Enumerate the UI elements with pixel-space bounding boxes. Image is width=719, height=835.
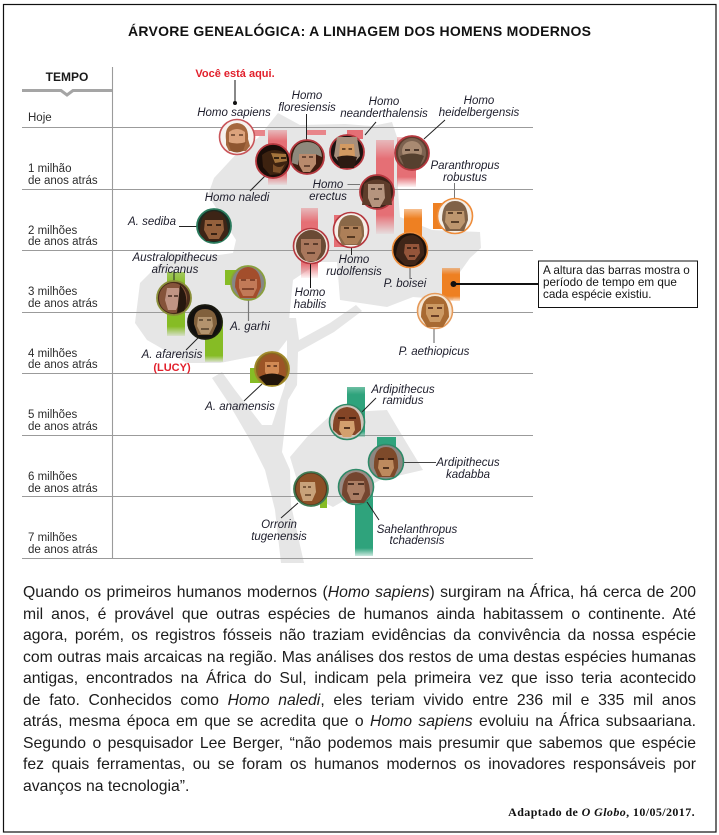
- time axis labels: de anos atrás: [28, 298, 98, 310]
- leader: [310, 264, 312, 288]
- portrait: [294, 472, 328, 506]
- species: Homo sapiens: [195, 68, 275, 154]
- label: P. boisei: [384, 278, 427, 290]
- portrait: [256, 144, 290, 178]
- label: P. aethiopicus: [399, 346, 470, 358]
- leader: [350, 248, 352, 255]
- label: A. anamensis: [204, 401, 275, 413]
- portrait: [231, 266, 265, 300]
- callout box: [538, 261, 698, 308]
- time grid: [22, 67, 533, 558]
- body paragraph: Quando os primeiros humanos modernos (Homo sapiens) surgiram na África, há cerca de 200: [23, 584, 696, 601]
- species duration bars: [167, 130, 460, 556]
- portrait: [330, 135, 364, 169]
- time axis labels: de anos atrás: [28, 236, 98, 248]
- portrait: [188, 305, 222, 339]
- species: Homo habilis: [294, 228, 328, 311]
- pointer dot: [233, 101, 237, 105]
- label: Orrorin: [261, 519, 297, 531]
- source credit: Adaptado de O Globo, 10/05/2017.: [508, 805, 695, 819]
- time axis heading: [22, 70, 112, 95]
- label: Ardipithecus: [436, 457, 500, 469]
- leader: [367, 502, 379, 520]
- portrait: [294, 228, 328, 264]
- time axis labels: Hoje: [28, 112, 52, 124]
- label: neanderthalensis: [340, 108, 428, 120]
- note: você está aqui: Você está aqui.: [195, 68, 275, 80]
- body paragraph: de fato. Conhecidos como Homo naledi, eles teriam vivido entre 236 mil e 335 mil anos: [23, 692, 696, 709]
- species: A. afarensis: [141, 305, 222, 374]
- label: rudolfensis: [326, 266, 382, 278]
- body paragraph: mil anos, é provável que outras espécies de humanos ainda habitassem o continente. Até: [23, 606, 696, 623]
- time axis labels: 5 milhões: [28, 409, 77, 421]
- portrait: [220, 120, 254, 154]
- label: tchadensis: [390, 535, 445, 547]
- species: Orrorin tugenensis: [251, 472, 328, 543]
- label: Australopithecus: [132, 252, 218, 264]
- label: ramidus: [383, 395, 424, 407]
- leader: [306, 114, 308, 140]
- callout pointer: [453, 283, 538, 285]
- species: Homo neanderthalensis: [330, 96, 428, 169]
- portrait: [197, 209, 231, 243]
- label: heidelbergensis: [439, 107, 520, 119]
- species: Homo naledi: [205, 144, 290, 204]
- label: floresiensis: [278, 102, 336, 114]
- body paragraph: fez quais ferramentas, ou se foram os humanos modernos os inovadores responsáveis por: [23, 756, 696, 773]
- portrait: [330, 404, 364, 440]
- label: Sahelanthropus: [377, 524, 457, 536]
- label: Homo: [339, 254, 369, 266]
- label: Ardipithecus: [371, 384, 435, 396]
- label: Homo: [369, 96, 399, 108]
- callout text: A altura das barras mostra o: [543, 264, 690, 277]
- body paragraph: atrás, mesma época em que se acredita que o Homo sapiens evoluiu na África subsaariana.: [23, 713, 696, 730]
- species: Homo heidelbergensis: [395, 95, 520, 170]
- label: A. garhi: [229, 321, 270, 333]
- leader: [179, 226, 197, 228]
- label: Homo: [292, 90, 322, 102]
- time axis labels: 2 milhões: [28, 225, 77, 237]
- leader: [348, 184, 360, 186]
- label: robustus: [443, 172, 487, 184]
- portrait: [368, 444, 404, 480]
- portrait: [290, 140, 324, 174]
- species: P. boisei: [384, 232, 428, 290]
- label: Homo sapiens: [197, 107, 271, 119]
- note: Lucy: (LUCY): [153, 362, 191, 374]
- time axis labels: de anos atrás: [28, 544, 98, 556]
- portrait: [255, 352, 289, 386]
- portrait: [418, 294, 452, 328]
- species: Ardipithecus kadabba: [368, 444, 500, 481]
- leader: [250, 176, 265, 191]
- label: erectus: [309, 191, 347, 203]
- species: Homo rudolfensis: [326, 212, 382, 278]
- species: A. garhi: [229, 266, 270, 333]
- label: Paranthropus: [430, 160, 500, 172]
- time axis heading: TEMPO: [46, 70, 88, 84]
- species: Ardipithecus ramidus: [330, 384, 435, 440]
- leader: [173, 270, 175, 281]
- portrait: [338, 470, 374, 504]
- label: Homo: [464, 95, 494, 107]
- time axis labels: 1 milhão: [28, 163, 71, 175]
- label: Homo: [295, 287, 325, 299]
- body paragraph: agora, porém, os registros fósseis não traziam evidências da convivência da nossa espécie: [23, 627, 696, 644]
- time axis labels: 3 milhões: [28, 286, 77, 298]
- species: Australopithecus africanus: [131, 252, 218, 315]
- time axis labels: [28, 112, 98, 556]
- leader: [424, 120, 445, 139]
- label: Homo: [313, 179, 343, 191]
- callout text: cada espécie existiu.: [543, 288, 652, 301]
- callout pointer dot: [450, 281, 456, 287]
- leader: [244, 384, 262, 401]
- body paragraph: antigas, encontrados na África do Sul, indicam pela primeira vez que isso teria acontecido: [23, 670, 696, 687]
- portrait: [395, 136, 429, 170]
- portrait: [360, 175, 394, 209]
- body paragraph: com outras mais arcaicas na região. Mas análises dos restos de uma destas espécies humanas: [23, 649, 696, 666]
- leader: [404, 462, 436, 464]
- species: Sahelanthropus tchadensis: [338, 470, 458, 547]
- body paragraph: avanços na tecnologia”.: [23, 778, 189, 795]
- time axis labels: 7 milhões: [28, 532, 77, 544]
- species: A. anamensis: [204, 352, 289, 413]
- leader: [409, 268, 411, 279]
- time axis labels: 6 milhões: [28, 471, 77, 483]
- portrait: [438, 198, 472, 234]
- leader: [454, 183, 456, 198]
- leader: [186, 338, 198, 350]
- callout: bar height explanation: [450, 261, 698, 308]
- label: tugenensis: [251, 531, 307, 543]
- time axis labels: 4 milhões: [28, 348, 77, 360]
- label: kadabba: [446, 469, 490, 481]
- label: A. afarensis: [141, 349, 203, 361]
- portrait: [157, 281, 191, 315]
- body paragraph: Segundo o pesquisador Lee Berger, “não podemos mais presumir que sabemos que espécie: [23, 735, 696, 752]
- time axis labels: de anos atrás: [28, 359, 98, 371]
- portrait: [334, 212, 368, 248]
- leader: [362, 398, 376, 412]
- portrait: [392, 232, 428, 268]
- callout text: período de tempo em que: [543, 276, 677, 289]
- species: Homo floresiensis: [278, 90, 336, 174]
- species: Paranthropus robustus: [430, 160, 500, 234]
- title: ÁRVORE GENEALÓGICA: A LINHAGEM DOS HOMENS MODERNOS: [128, 22, 591, 39]
- species: Homo erectus: [309, 175, 394, 209]
- time axis labels: de anos atrás: [28, 421, 98, 433]
- time axis labels: de anos atrás: [28, 483, 98, 495]
- leader: [248, 300, 250, 321]
- species: A. sediba: [127, 209, 231, 243]
- tree silhouette background: [135, 113, 481, 563]
- label: Homo naledi: [205, 192, 270, 204]
- body paragraph: [23, 583, 696, 795]
- leader: [433, 329, 435, 343]
- label: habilis: [294, 299, 327, 311]
- species: P. aethiopicus: [399, 294, 470, 358]
- leader: [281, 503, 298, 518]
- label: africanus: [152, 264, 199, 276]
- label: A. sediba: [127, 216, 176, 228]
- leader: [365, 122, 376, 135]
- time axis labels: de anos atrás: [28, 175, 98, 187]
- pointer: [234, 80, 236, 103]
